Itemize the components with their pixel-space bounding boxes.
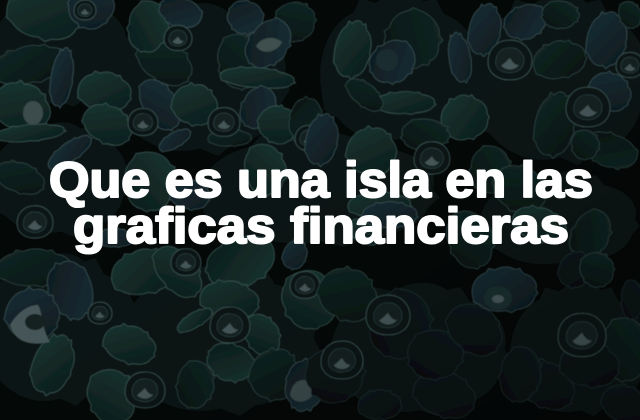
rosette: left lower xyxy=(0,249,112,401)
rosette: title band row xyxy=(17,199,620,276)
rosette: left edge xyxy=(0,39,77,145)
rosette: far right xyxy=(582,0,640,78)
rosette: centre lower xyxy=(79,318,218,420)
rosette: centre xyxy=(174,276,288,388)
rosette: below title centre-left xyxy=(107,226,312,307)
rosette: top centre xyxy=(213,0,323,94)
rosette: lower right xyxy=(437,246,621,420)
title line 1: Que es una isla en las xyxy=(49,152,593,208)
rosette: centre right of upper row xyxy=(240,94,325,199)
rosette: below left headline xyxy=(0,129,212,213)
rosette: centre right of lower row xyxy=(242,262,347,415)
rosette: centre left xyxy=(75,67,194,156)
rosette: under upper middle xyxy=(302,91,556,225)
rosette: top centre left xyxy=(123,0,206,96)
rosette: upper right xyxy=(445,0,590,85)
title xyxy=(49,152,593,254)
rosette: far lower right xyxy=(556,280,640,420)
rosette: lower centre right xyxy=(295,257,483,420)
title line 2: graficas financieras xyxy=(73,198,569,254)
rosette: top left xyxy=(1,0,125,49)
rosette: upper middle right xyxy=(330,0,452,118)
rosette: centre xyxy=(166,77,284,147)
rosette: middle right xyxy=(530,64,640,176)
